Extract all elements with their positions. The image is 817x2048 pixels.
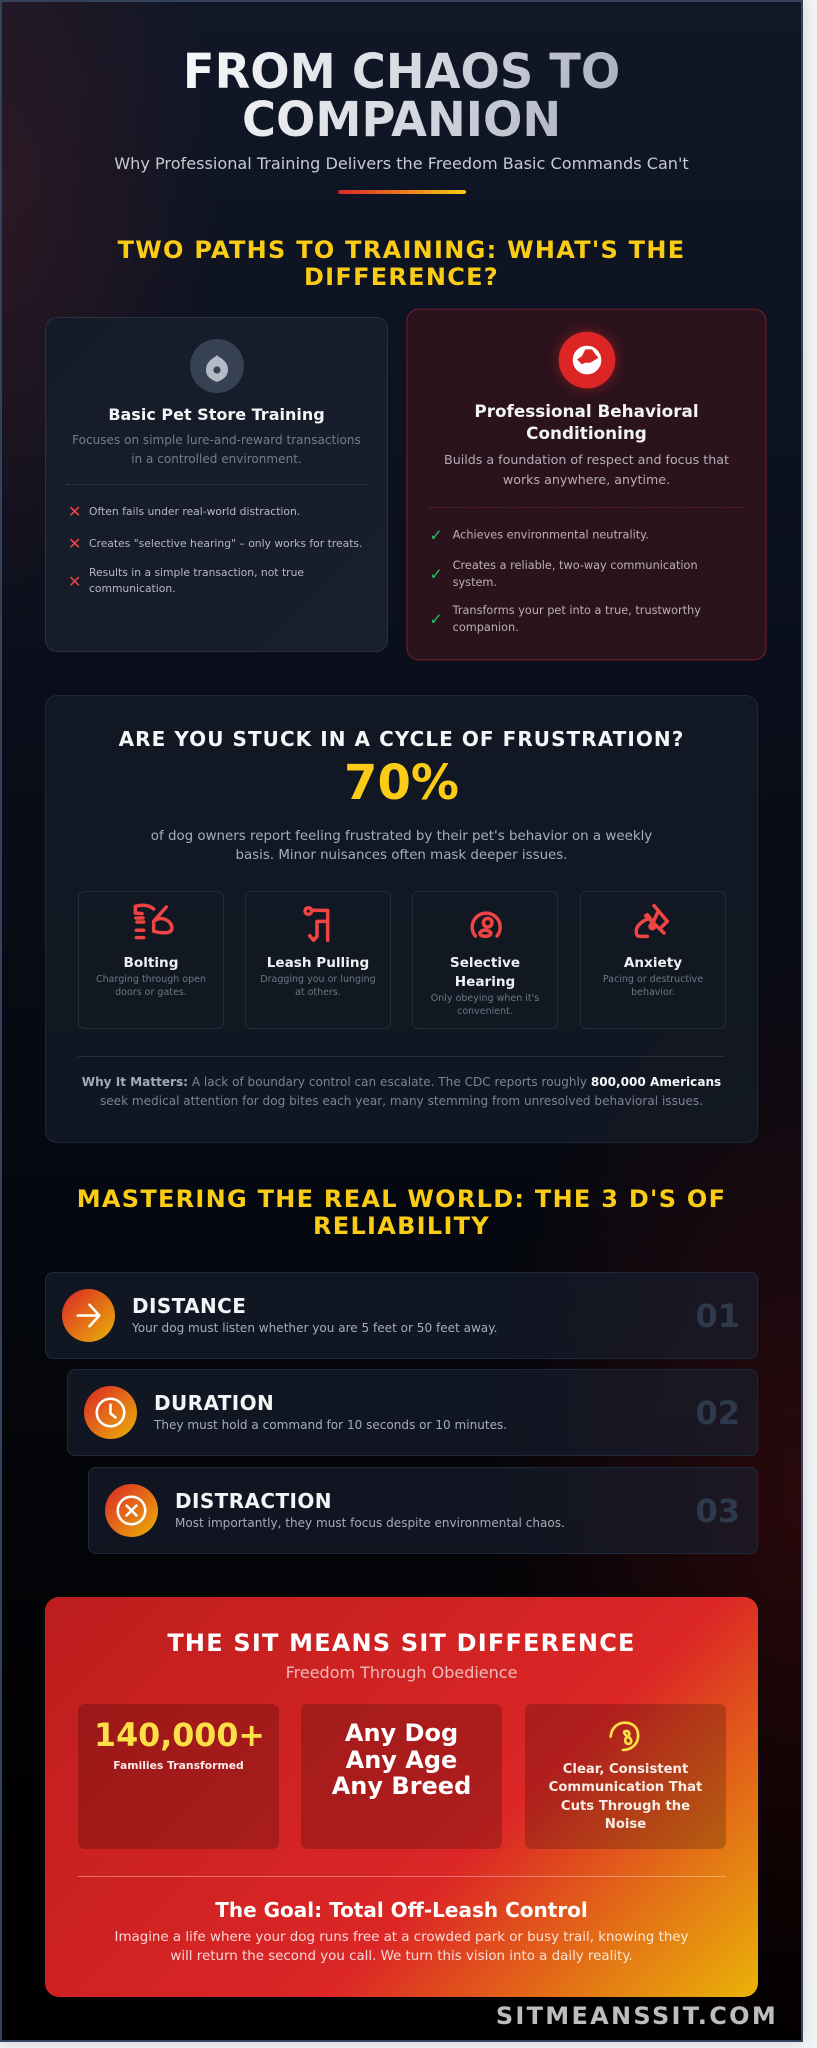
card: bolting	[78, 891, 224, 1029]
heading: frustration: ARE YOU STUCK IN A CYCLE OF FRUSTRATION?	[119, 727, 684, 751]
card title: Basic Pet Store Training	[108, 405, 325, 424]
card: selective hearing: Only obeying when it's	[431, 993, 539, 1004]
stat box: communication: Communication That	[549, 1780, 702, 1795]
divider	[78, 1876, 726, 1877]
title: COMPANION	[242, 92, 561, 148]
panel subtitle: Freedom Through Obedience	[286, 1663, 517, 1682]
stat box: any dog: Any Breed	[332, 1772, 471, 1800]
panel heading: THE SIT MEANS SIT DIFFERENCE	[167, 1628, 636, 1656]
divider	[78, 1056, 725, 1057]
step: distraction	[88, 1467, 758, 1554]
card title: Professional Behavioral	[474, 401, 699, 421]
stat box: any dog: Any Age	[346, 1746, 457, 1774]
divider	[428, 507, 743, 508]
list: drawbacks: communication.	[89, 582, 176, 595]
icon: x circle	[105, 1484, 158, 1537]
card description: Builds a foundation of respect and focus that	[444, 452, 729, 467]
panel: professional behavioral conditioning	[406, 309, 767, 660]
heading: 3 Ds: MASTERING THE REAL WORLD: THE 3 D'S OF	[77, 1185, 726, 1213]
step: distraction: 03	[695, 1492, 740, 1530]
card title	[474, 401, 699, 443]
step: distance: Your dog must listen whether you are 5 feet or 50 feet away.	[132, 1321, 497, 1335]
step: duration: They must hold a command for 10 seconds or 10 minutes.	[154, 1418, 507, 1432]
why it matters: Why It Matters: A lack of boundary control can escalate. The CDC reports roughly 800,000 Americans	[82, 1075, 721, 1089]
heading: two paths	[118, 236, 685, 291]
card: selective hearing: Selective	[450, 955, 520, 971]
list: benefits: ✓	[430, 565, 443, 584]
step: duration: 02	[695, 1394, 740, 1432]
icon: arrow	[62, 1289, 115, 1342]
card description	[444, 452, 729, 487]
title: FROM CHAOS TO	[183, 44, 620, 100]
goal description: Imagine a life where your dog runs free at a crowded park or busy trail, knowing they	[115, 1930, 688, 1945]
stat box: any dog: Any Dog	[345, 1719, 458, 1747]
card description	[72, 433, 361, 466]
card title: Conditioning	[526, 423, 647, 443]
title	[183, 44, 620, 148]
list: benefits	[430, 526, 701, 634]
icon: bolting	[134, 904, 174, 940]
list: drawbacks: Creates "selective hearing" – only works for treats.	[89, 537, 362, 550]
goal description	[115, 1930, 688, 1964]
why it matters: seek medical attention for dog bites each year, many stemming from unresolved behavioral issues.	[100, 1094, 703, 1108]
step: distraction: Most importantly, they must focus despite environmental chaos.	[175, 1516, 565, 1530]
step: duration	[67, 1369, 758, 1456]
icon: clock	[84, 1386, 137, 1439]
stat: 70%: 70%	[344, 755, 459, 811]
list: drawbacks	[68, 502, 362, 595]
list: benefits: ✓	[430, 610, 443, 629]
card: bolting: Charging through open	[96, 974, 206, 985]
heading: 3 Ds: RELIABILITY	[313, 1212, 490, 1240]
card: leash pulling: at others.	[295, 987, 341, 998]
list: benefits: ✓	[430, 526, 443, 545]
card: leash pulling: Dragging you or lunging	[260, 974, 376, 985]
heading: 3 Ds	[77, 1185, 726, 1240]
icon: hearing	[470, 911, 502, 938]
card: selective hearing: convenient.	[457, 1006, 513, 1017]
icon: basic training	[190, 339, 244, 393]
list: benefits: Creates a reliable, two-way communication	[453, 559, 698, 572]
panel: the sit means sit difference	[45, 1597, 758, 1997]
card: anxiety: Anxiety	[624, 955, 682, 971]
goal description: will return the second you call. We turn this vision into a daily reality.	[170, 1949, 633, 1964]
list: benefits: Transforms your pet into a true, trustworthy	[453, 604, 701, 617]
card: anxiety: Pacing or destructive	[603, 974, 703, 985]
panel: cycle of frustration	[45, 695, 758, 1143]
card: leash pulling	[245, 891, 391, 1029]
step: distance: 01	[695, 1297, 740, 1335]
why it matters	[82, 1075, 721, 1108]
list: drawbacks: Often fails under real-world distraction.	[89, 505, 300, 518]
step: distance: DISTANCE	[132, 1294, 246, 1318]
card description: works anywhere, anytime.	[503, 472, 670, 487]
stat box: communication: Clear, Consistent	[563, 1762, 688, 1776]
stat box: communication: Cuts Through the	[561, 1799, 690, 1814]
stat description: basis. Minor nuisances often mask deeper issues.	[235, 848, 568, 862]
card description: Focuses on simple lure-and-reward transactions	[72, 433, 361, 447]
list: benefits: system.	[453, 575, 497, 589]
stat box: families: Families Transformed	[113, 1759, 244, 1772]
stat box: communication	[525, 1704, 726, 1849]
heading: two paths: TWO PATHS TO TRAINING: WHAT'S THE	[118, 236, 685, 264]
stat box: communication: Noise	[605, 1817, 646, 1832]
icon: ear	[609, 1721, 640, 1752]
icon: anxiety	[634, 904, 670, 938]
list: benefits: companion.	[453, 620, 519, 634]
card: selective hearing: Hearing	[455, 974, 515, 990]
list: drawbacks: ✕	[68, 502, 81, 521]
goal title: The Goal: Total Off-Leash Control	[215, 1898, 588, 1922]
divider	[67, 484, 367, 485]
icon: leash	[303, 906, 330, 942]
step: distance	[45, 1272, 758, 1359]
stat description	[151, 828, 652, 862]
heading: two paths: DIFFERENCE?	[304, 263, 499, 291]
subtitle: Why Professional Training Delivers the Freedom Basic Commands Can't	[114, 154, 689, 173]
card description: in a controlled environment.	[131, 452, 302, 466]
list: benefits: Achieves environmental neutrality.	[453, 528, 649, 542]
stat box: any dog	[301, 1704, 502, 1849]
list: drawbacks: ✕	[68, 534, 81, 553]
icon: professional training	[559, 332, 615, 388]
footer: website: SITMEANSSIT.COM	[496, 2002, 778, 2030]
card: leash pulling: Leash Pulling	[267, 955, 369, 971]
card: bolting: doors or gates.	[115, 987, 187, 998]
card: bolting: Bolting	[124, 955, 178, 971]
accent bar	[338, 190, 466, 194]
step: distraction: DISTRACTION	[175, 1488, 332, 1512]
stat box: families	[78, 1704, 279, 1849]
panel: basic pet store training	[45, 317, 388, 652]
card: selective hearing	[412, 891, 558, 1029]
stat description: of dog owners report feeling frustrated by their pet's behavior on a weekly	[151, 828, 652, 844]
list: drawbacks: Results in a simple transaction, not true	[89, 566, 304, 579]
list: drawbacks: ✕	[68, 572, 81, 591]
step: duration: DURATION	[154, 1390, 274, 1414]
card: anxiety	[580, 891, 726, 1029]
stat box: families: 140,000+	[94, 1718, 265, 1754]
card: anxiety: behavior.	[631, 987, 675, 998]
header	[114, 44, 689, 194]
